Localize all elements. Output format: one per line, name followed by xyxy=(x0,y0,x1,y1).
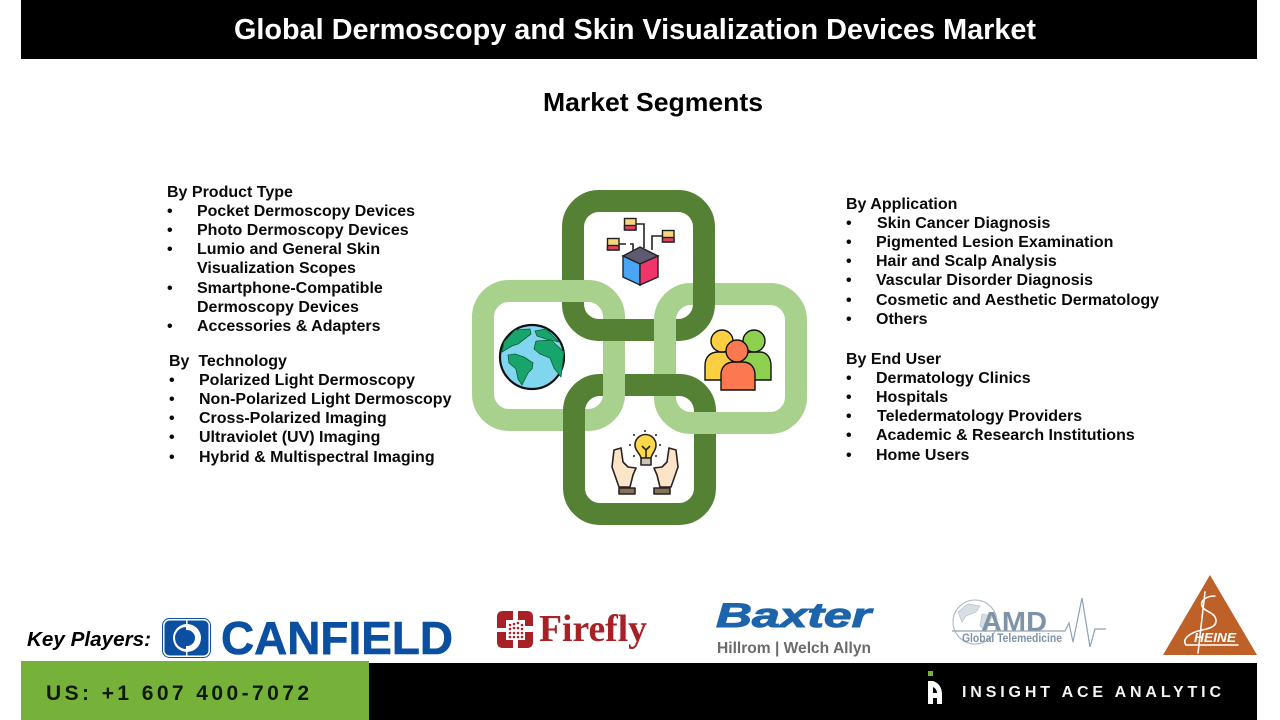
text block: by end user: Home Users xyxy=(876,447,969,464)
text block: by technology: Cross-Polarized Imaging xyxy=(199,410,387,427)
interlocking rings diagram xyxy=(483,201,796,514)
text block: by application: • xyxy=(846,234,852,251)
key players label: Key Players: xyxy=(27,629,151,651)
text block: by technology: Polarized Light Dermoscopy xyxy=(199,372,415,389)
text block: by product type: • xyxy=(167,241,173,258)
text block: by end user: • xyxy=(846,408,852,425)
title banner xyxy=(21,0,1257,59)
text block: by technology: • xyxy=(169,410,175,427)
text block: by application: • xyxy=(846,253,852,270)
text block: by product type: Photo Dermoscopy Devices xyxy=(197,222,409,239)
logo: Heine: HEINE xyxy=(1194,631,1237,645)
text block: by application: • xyxy=(846,292,852,309)
text block: by technology: • xyxy=(169,372,175,389)
text block: by end user: Dermatology Clinics xyxy=(876,370,1031,387)
text block: by end user: • xyxy=(846,370,852,387)
text block: by product type: Lumio and General Skin xyxy=(197,241,380,258)
text block: by application xyxy=(846,196,1159,328)
text block: by application: By Application xyxy=(846,196,957,213)
text block: by end user xyxy=(846,351,1135,464)
text block: by end user: By End User xyxy=(846,351,941,368)
text block: by technology: • xyxy=(169,449,175,466)
icon: hands holding light bulb xyxy=(612,430,678,494)
logo: AMD Global Telemedicine: Global Telemedicine xyxy=(962,633,1062,645)
text block: by product type: By Product Type xyxy=(167,184,293,201)
text block: by technology: Hybrid & Multispectral Imaging xyxy=(199,449,435,466)
text block: by application: • xyxy=(846,272,852,289)
text block: by application: Hair and Scalp Analysis xyxy=(876,253,1057,270)
text block: by application: • xyxy=(846,311,852,328)
title banner: Global Dermoscopy and Skin Visualization Devices Market xyxy=(234,14,1036,46)
text block: by product type: • xyxy=(167,222,173,239)
text block: by application: Skin Cancer Diagnosis xyxy=(877,215,1050,232)
text block: by technology: Ultraviolet (UV) Imaging xyxy=(199,429,380,446)
text block: by application: Pigmented Lesion Examination xyxy=(876,234,1113,251)
text block: by technology: • xyxy=(169,391,175,408)
text block: by product type: Pocket Dermoscopy Devices xyxy=(197,203,415,220)
logo: Baxter Hillrom Welch Allyn: Hillrom | Welch Allyn xyxy=(717,640,871,657)
text block: by product type xyxy=(167,184,415,335)
logo: AMD Global Telemedicine xyxy=(952,598,1106,647)
logo: Baxter Hillrom Welch Allyn xyxy=(716,597,874,657)
text block: by technology xyxy=(169,353,452,466)
text block: by application: Vascular Disorder Diagnosis xyxy=(876,272,1093,289)
text block: by application: • xyxy=(846,215,852,232)
logo: Baxter Hillrom Welch Allyn: Baxter xyxy=(716,597,874,635)
text block: by product type: • xyxy=(167,280,173,297)
logo: Heine xyxy=(1163,575,1257,655)
logo: Canfield: CANFIELD xyxy=(221,612,453,664)
text block: by end user: • xyxy=(846,427,852,444)
text block: by product type: Accessories & Adapters xyxy=(197,318,381,335)
heading: market segments: Market Segments xyxy=(543,87,763,117)
text block: by technology: By Technology xyxy=(169,353,287,370)
footer black bar xyxy=(369,663,1257,720)
footer brand: Insight Ace Analytic: INSIGHT ACE ANALYTIC xyxy=(962,684,1221,701)
text block: by product type: Dermoscopy Devices xyxy=(197,299,359,316)
logo: AMD Global Telemedicine: AMD xyxy=(981,606,1047,637)
text block: by technology: Non-Polarized Light Dermoscopy xyxy=(199,391,452,408)
text block: by end user: • xyxy=(846,389,852,406)
text block: by end user: Hospitals xyxy=(876,389,948,406)
footer phone panel xyxy=(21,661,369,720)
text block: by application: Others xyxy=(876,311,928,328)
text block: by application: Cosmetic and Aesthetic Dermatology xyxy=(876,292,1159,309)
icon: globe xyxy=(500,325,564,389)
text block: by product type: Smartphone-Compatible xyxy=(197,280,383,297)
text block: by end user: • xyxy=(846,447,852,464)
text block: by end user: Teledermatology Providers xyxy=(877,408,1082,425)
icon: product cube with nodes xyxy=(608,218,674,285)
text block: by end user: Academic & Research Institutions xyxy=(876,427,1135,444)
text block: by technology: • xyxy=(169,429,175,446)
icon: people group xyxy=(705,330,771,390)
text block: by product type: Visualization Scopes xyxy=(197,260,356,277)
text block: by product type: • xyxy=(167,203,173,220)
footer brand: Insight Ace Analytic xyxy=(928,671,1221,704)
text block: by product type: • xyxy=(167,318,173,335)
footer phone panel: US: +1 607 400-7072 xyxy=(46,682,309,705)
logo: Firefly: Firefly xyxy=(539,608,647,650)
